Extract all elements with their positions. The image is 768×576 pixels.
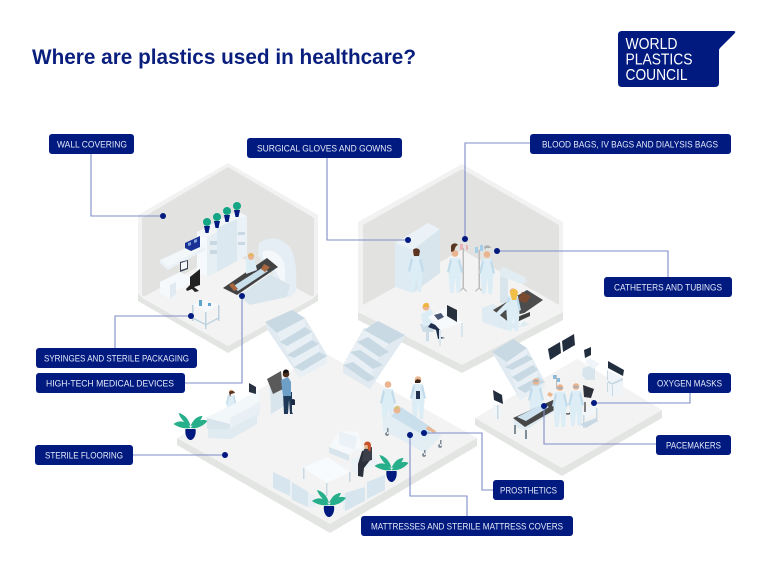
IV stands with bags <box>459 244 483 292</box>
label: wall covering <box>49 134 134 154</box>
label: catheters and tubings <box>604 277 732 297</box>
logo: World Plastics Council: COUNCIL <box>626 67 688 84</box>
label: prosthetics <box>493 480 564 500</box>
lounge seating and coffee table <box>273 431 385 511</box>
reception desk and receptionist <box>207 383 260 439</box>
operating table and surgeons <box>513 375 584 439</box>
seated woman <box>358 442 372 477</box>
callout leader lines and markers <box>91 143 690 516</box>
operating room equipment <box>493 334 624 428</box>
stairs: to operating room <box>492 339 545 400</box>
floor: reception and lounge <box>177 352 477 533</box>
label: mattresses and sterile mattress covers: MATTRESSES AND STERILE MATTRESS COVERS <box>371 522 563 532</box>
label: sterile flooring: STERILE FLOORING <box>45 450 123 462</box>
label: surgical gloves and gowns <box>247 138 402 158</box>
logo: World Plastics Council: WORLD <box>626 36 678 53</box>
label: sterile flooring <box>35 445 133 465</box>
plants on the shelf <box>203 202 241 233</box>
logo: World Plastics Council <box>618 31 735 87</box>
label: high-tech medical devices <box>36 373 185 393</box>
label: catheters and tubings: CATHETERS AND TUBINGS <box>614 282 722 294</box>
label: oxygen masks <box>648 373 731 393</box>
supply cart <box>192 300 220 329</box>
stairs: from MRI room <box>265 310 327 378</box>
label: oxygen masks: OXYGEN MASKS <box>657 378 722 390</box>
room: MRI room <box>138 163 318 353</box>
label: blood bags <box>530 134 731 154</box>
potted plants <box>174 413 408 517</box>
label: surgical gloves and gowns: SURGICAL GLOVES AND GOWNS <box>257 144 392 154</box>
label: pacemakers <box>656 435 731 455</box>
bed, nurse and patient <box>380 376 442 457</box>
logo: World Plastics Council: PLASTICS <box>626 52 692 68</box>
label: pacemakers: PACEMAKERS <box>666 440 721 452</box>
MRI scanner with patient <box>223 238 296 305</box>
two medical staff standing <box>447 243 495 294</box>
floor: operating room <box>475 359 662 476</box>
label: blood bags: BLOOD BAGS, IV BAGS AND DIALYSIS BAGS <box>542 140 718 150</box>
label: high-tech medical devices: HIGH-TECH MEDICAL DEVICES <box>46 378 174 390</box>
label: wall covering: WALL COVERING <box>57 140 127 150</box>
room: treatment room <box>358 164 563 373</box>
check-in kiosk and man <box>267 369 295 414</box>
label: mattresses and sterile mattress covers <box>361 516 573 536</box>
label: syringes and sterile packaging: SYRINGES AND STERILE PACKAGING <box>44 354 189 364</box>
storage cabinet <box>395 223 440 293</box>
stairs: from treatment room <box>343 321 405 389</box>
label: prosthetics: PROSTHETICS <box>500 486 557 496</box>
desk with computer and chair <box>160 236 205 299</box>
robotic treatment bed with patient and nurse <box>482 267 543 331</box>
title: Where are plastics used in healthcare? <box>32 45 416 69</box>
shelving and cabinet <box>197 211 247 277</box>
staff member at cabinet <box>408 248 424 292</box>
label: syringes and sterile packaging <box>36 348 197 368</box>
seated clinician at desk <box>420 303 463 346</box>
